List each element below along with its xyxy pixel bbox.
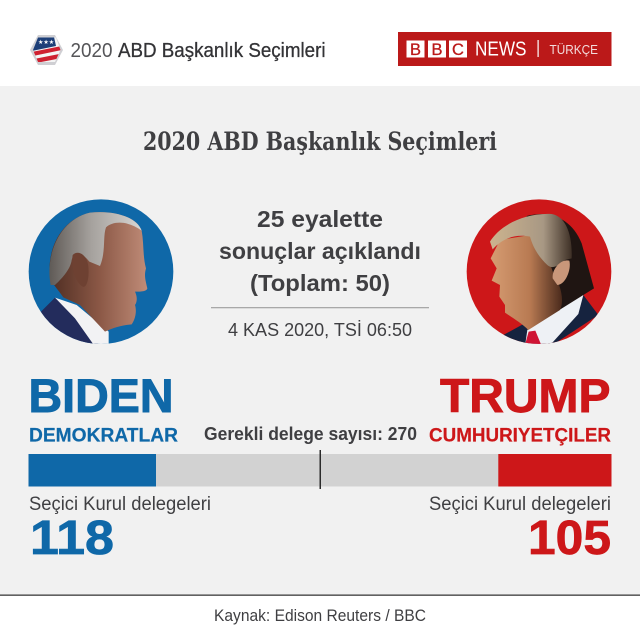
logo: BBC News Türkçe: NEWS [475,38,526,60]
dark back hair and neck shadow [526,214,594,310]
logo: BBC News Türkçe: B [410,41,421,59]
source: Kaynak: Edison Reuters / BBC [214,607,426,625]
Trump delegates label: Seçici Kurul delegeleri [429,493,611,515]
logo: BBC News Türkçe: TÜRKÇE [550,42,598,57]
shirt [525,295,583,346]
face and neck [491,233,562,330]
center status text: (Toplam: 50) [250,270,390,296]
jacket [503,295,598,347]
shirt collar [55,298,109,347]
Trump name: TRUMP [440,369,610,422]
header title: 2020 [70,39,112,62]
center status text [219,206,421,296]
Biden name: BIDEN [28,369,174,422]
progress bar [28,450,612,489]
main grey panel [0,86,640,595]
head and neck [49,212,147,332]
portrait: Biden [29,199,173,347]
center status text: sonuçlar açıklandı [219,238,421,264]
jacket [41,298,100,347]
logo: BBC News Türkçe: B [431,41,443,59]
Biden delegates: 118 [30,512,114,565]
Biden delegates label: Seçici Kurul delegeleri [29,493,211,515]
logo: BBC News Türkçe [398,32,612,66]
logo: BBC News Türkçe: C [452,41,464,59]
ear [72,253,89,287]
Biden party: DEMOKRATLAR [29,426,178,446]
center status text: 25 eyalette [257,206,383,232]
icon: election flag hexagon [30,35,64,65]
icon: election flag hexagon: ★★★ [38,39,54,46]
Trump delegates: 105 [528,512,611,565]
hair [490,214,572,267]
hair [49,212,142,285]
portrait: Trump [467,199,611,347]
header: ABD Başkanlık Seçimleri [118,39,326,62]
ear [553,260,570,285]
date: 4 KAS 2020, TSİ 06:50 [228,319,412,340]
Trump party: CUMHURIYETÇILER [429,426,611,446]
main title: 2020 ABD Başkanlık Seçimleri [143,127,497,156]
required delegates: Gerekli delege sayısı: 270 [204,423,417,444]
tie [526,330,541,344]
header [30,32,612,66]
